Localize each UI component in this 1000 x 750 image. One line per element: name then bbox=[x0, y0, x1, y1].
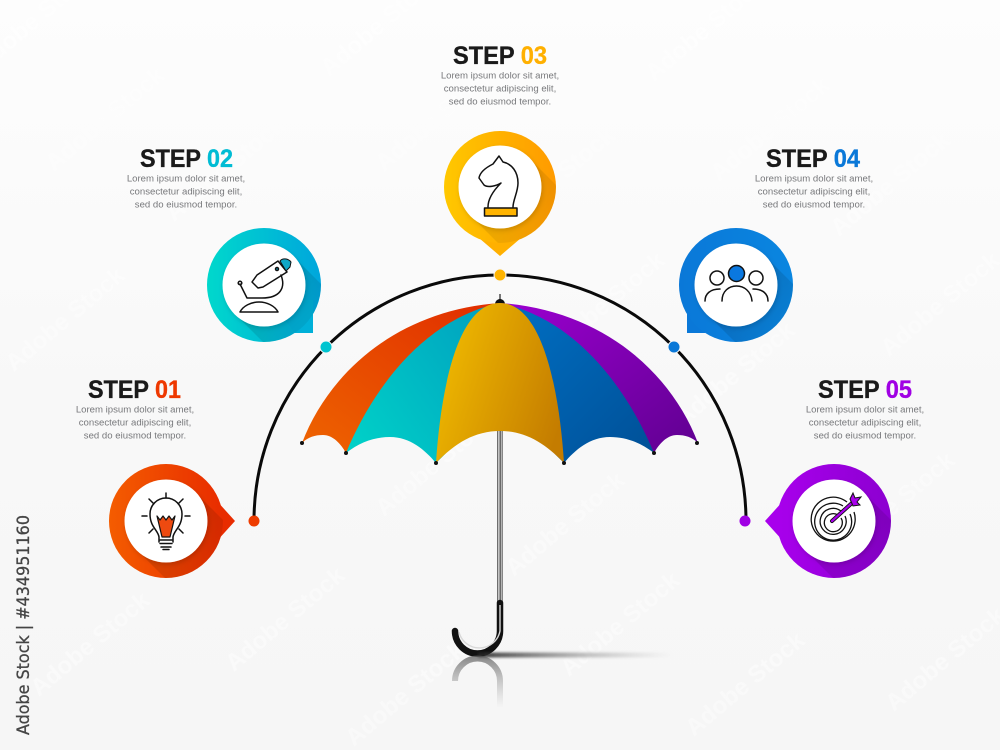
step 03 text bbox=[441, 42, 559, 108]
watermark pattern: Adobe Stock bbox=[680, 626, 811, 742]
watermark pattern: Adobe Stock bbox=[555, 566, 686, 682]
watermark pattern: Adobe Stock bbox=[500, 466, 631, 582]
canopy panel: yellow bbox=[436, 303, 564, 463]
step 05 text bbox=[806, 376, 924, 442]
step 05 text: Lorem ipsum dolor sit amet, bbox=[806, 404, 924, 416]
connector arc bbox=[248, 269, 750, 526]
watermark pattern: Adobe Stock bbox=[0, 261, 131, 377]
step 03 text: consectetur adipiscing elit, bbox=[444, 84, 556, 94]
step 04 text: sed do eiusmod tempor. bbox=[763, 200, 865, 210]
watermark pattern: Adobe Stock bbox=[340, 636, 471, 750]
step 02 pin bbox=[207, 228, 321, 342]
step 02 text: consectetur adipiscing elit, bbox=[130, 186, 242, 198]
handle reflection bbox=[455, 659, 500, 708]
step 05 pin bbox=[765, 464, 891, 578]
step 03 text: STEP 03 bbox=[453, 42, 547, 70]
umbrella bbox=[300, 294, 699, 708]
canopy panel: teal bbox=[346, 303, 500, 463]
watermark pattern: Adobe Stock bbox=[220, 561, 351, 677]
step 01 text: Lorem ipsum dolor sit amet, bbox=[76, 404, 194, 416]
tip bbox=[495, 294, 505, 304]
watermark pattern: Adobe Stock bbox=[370, 61, 501, 177]
step 03 text: sed do eiusmod tempor. bbox=[449, 96, 551, 108]
ground shadow bbox=[478, 652, 673, 658]
watermark pattern: Adobe Stock bbox=[25, 586, 156, 702]
step 03 pin bbox=[444, 131, 556, 256]
step 04 pin bbox=[679, 228, 793, 342]
umbrella handle bbox=[455, 603, 500, 654]
canopy panel: blue bbox=[500, 303, 654, 463]
step 04 text bbox=[755, 145, 873, 210]
icon: target with arrow bbox=[811, 493, 861, 541]
step 04 text: STEP 04 bbox=[766, 145, 860, 173]
step 05 text: sed do eiusmod tempor. bbox=[814, 430, 916, 442]
step 01 pin bbox=[109, 464, 235, 578]
step 01 text bbox=[76, 376, 194, 442]
watermark pattern: Adobe Stock bbox=[40, 61, 171, 177]
step 04 text: Lorem ipsum dolor sit amet, bbox=[755, 174, 873, 184]
step 02 text bbox=[127, 145, 245, 210]
icon: light bulb bbox=[142, 493, 190, 550]
watermark pattern: Adobe Stock bbox=[490, 121, 621, 237]
watermark pattern: Adobe Stock bbox=[160, 111, 291, 227]
step 02 text: STEP 02 bbox=[140, 145, 233, 173]
icon: team of people bbox=[705, 266, 768, 301]
rib tips bbox=[300, 441, 699, 465]
watermark pattern: Adobe Stock bbox=[370, 406, 501, 522]
step 05 text: STEP 05 bbox=[818, 376, 912, 404]
icon: chess knight bbox=[479, 156, 518, 216]
watermark pattern: Adobe Stock bbox=[330, 301, 461, 417]
canopy panel: red bbox=[302, 303, 500, 453]
watermark pattern: Adobe Stock bbox=[830, 446, 961, 562]
watermark pattern: Adobe Stock bbox=[540, 246, 671, 362]
step 01 text: sed do eiusmod tempor. bbox=[84, 430, 186, 442]
canopy panel: purple bbox=[500, 303, 698, 453]
step 04 text: consectetur adipiscing elit, bbox=[758, 186, 870, 198]
umbrella shaft bbox=[497, 425, 503, 605]
icon: microscope bbox=[238, 259, 291, 312]
stock id label: Adobe Stock | #434951160 bbox=[14, 515, 34, 735]
watermark pattern: Adobe Stock bbox=[825, 126, 956, 242]
step 02 text: Lorem ipsum dolor sit amet, bbox=[127, 174, 245, 184]
step 05 text: consectetur adipiscing elit, bbox=[809, 418, 921, 428]
step 02 text: sed do eiusmod tempor. bbox=[135, 200, 237, 210]
watermark pattern: Adobe Stock bbox=[705, 71, 836, 187]
step 01 text: consectetur adipiscing elit, bbox=[79, 418, 191, 428]
watermark pattern: Adobe Stock bbox=[670, 316, 801, 432]
step 03 text: Lorem ipsum dolor sit amet, bbox=[441, 70, 559, 82]
step 01 text: STEP 01 bbox=[88, 376, 181, 404]
